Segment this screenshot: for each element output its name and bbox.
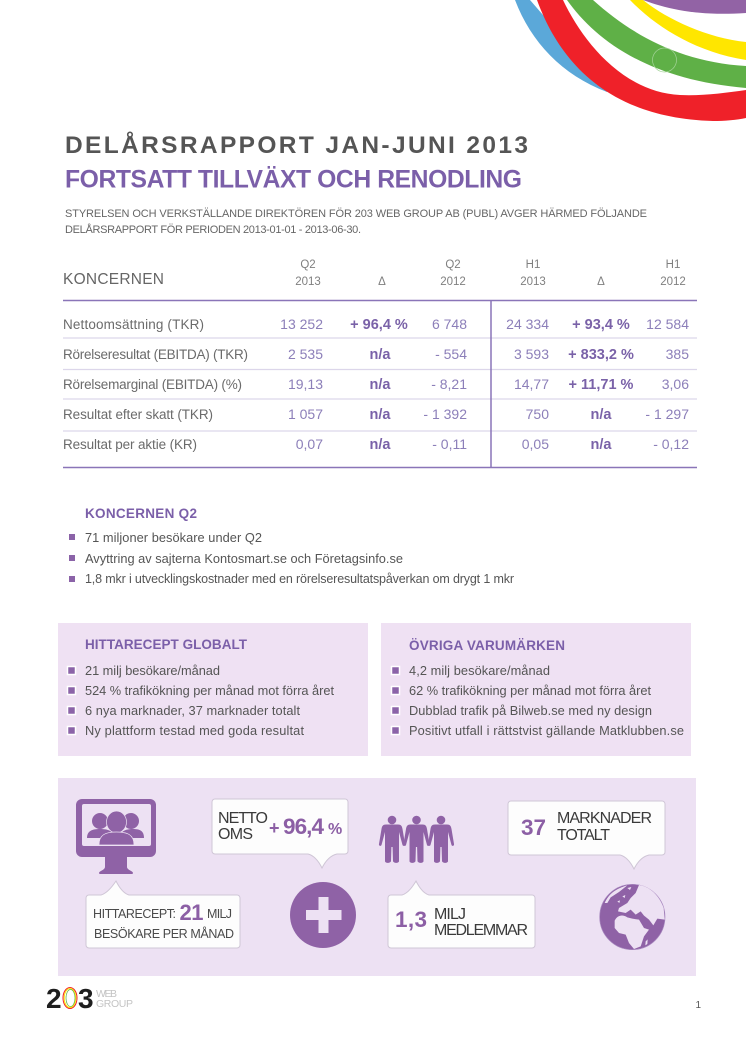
logo: 203 Web Group: WEB — [96, 988, 117, 1000]
callout: 1,3 milj medlemmar: MEDLEMMAR — [434, 922, 528, 939]
column headers: 2012 — [440, 276, 466, 288]
row: Nettoomsättning — [63, 316, 689, 333]
subtitle: FORTSATT TILLVÄXT OCH RENODLING — [65, 166, 522, 194]
row: Resultat efter skatt: - 1 392 — [423, 406, 467, 422]
callout: Hittarecept 21 milj: MILJ — [207, 907, 232, 921]
column headers: Δ — [597, 276, 605, 288]
row: Rörelsemarginal: Rörelsemarginal (EBITDA) (%) — [63, 377, 242, 392]
row: Resultat efter skatt: Resultat efter skatt (TKR) — [63, 407, 213, 422]
icon: monitor with people — [76, 799, 156, 874]
row: Resultat efter skatt: n/a — [591, 407, 612, 423]
icon: globe — [600, 884, 665, 950]
panel list: Dubblad trafik på Bilweb.se med ny design — [409, 703, 652, 718]
column headers: Q2 — [445, 259, 461, 271]
logo: 203 Web Group — [46, 983, 133, 1014]
row: Resultat per aktie: 0,05 — [522, 436, 549, 452]
row: Nettoomsättning: 12 584 — [646, 316, 689, 332]
callout: 37 marknader totalt: TOTALT — [557, 827, 610, 844]
row: Rörelseresultat: + 833,2 % — [568, 347, 634, 363]
row: Rörelseresultat — [63, 346, 689, 363]
row: Resultat efter skatt — [63, 406, 689, 423]
panel heading: HITTARECEPT GLOBALT — [85, 637, 248, 652]
logo: 203 Web Group: GROUP — [96, 998, 133, 1010]
row: Rörelsemarginal: - 8,21 — [431, 376, 467, 392]
row: Nettoomsättning: 24 334 — [506, 316, 549, 332]
callout: 37 marknader totalt: MARKNADER — [557, 810, 652, 827]
callout: 1,3 milj medlemmar: 1,3 — [395, 907, 427, 932]
row: Rörelseresultat: Rörelseresultat (EBITDA) (TKR) — [63, 347, 248, 362]
icon: three people — [379, 816, 454, 863]
callout: Netto oms +96,4 %: NETTO — [218, 810, 268, 827]
column headers — [295, 259, 686, 288]
callout: Hittarecept 21 milj: BESÖKARE PER MÅNAD — [94, 926, 234, 941]
callout: 37 marknader totalt — [508, 801, 665, 869]
panel: Hittarecept globalt — [58, 623, 368, 756]
panel list: 62 % trafikökning per månad mot förra året — [409, 683, 651, 698]
column headers: 2013 — [520, 276, 546, 288]
icon: plus circle — [290, 882, 356, 948]
panel list — [68, 663, 334, 738]
panel list: 524 % trafikökning per månad mot förra året — [85, 683, 334, 698]
row: Rörelseresultat: - 554 — [435, 346, 467, 362]
panel list: Positivt utfall i rättstvist gällande Matklubben.se — [409, 723, 684, 738]
column headers: 2013 — [295, 276, 321, 288]
panel heading: ÖVRIGA VARUMÄRKEN — [409, 638, 565, 653]
callout: 1,3 milj medlemmar — [388, 881, 535, 948]
row: Rörelsemarginal: 3,06 — [662, 376, 689, 392]
row: Nettoomsättning: + 96,4 % — [350, 317, 408, 333]
intro text: STYRELSEN OCH VERKSTÄLLANDE DIREKTÖREN FÖR 203 WEB GROUP AB (PUBL) AVGER HÄRMED FÖLJANDE — [65, 208, 647, 220]
bullet list: Avyttring av sajterna Kontosmart.se och Företagsinfo.se — [85, 551, 403, 566]
panel list: 21 milj besökare/månad — [85, 663, 220, 678]
title: DELÅRSRAPPORT JAN-JUNI 2013 — [65, 131, 528, 159]
callout: 37 marknader totalt: 37 — [521, 815, 546, 840]
callout: Netto oms +96,4 %: OMS — [218, 826, 253, 843]
logo: 203 Web Group: 2 — [46, 983, 62, 1014]
row: Resultat per aktie: n/a — [591, 437, 612, 453]
callout: Hittarecept 21 milj — [86, 881, 240, 948]
row: Resultat per aktie: n/a — [370, 437, 391, 453]
row: Resultat per aktie — [63, 436, 689, 453]
panel: Övriga varumärken — [381, 623, 691, 756]
panel: key figures — [58, 778, 696, 976]
intro text — [65, 208, 647, 236]
callout: Hittarecept 21 milj: 21 — [180, 900, 204, 925]
column headers: 2012 — [660, 276, 686, 288]
section: Koncernen Q2 — [69, 506, 514, 586]
row: Nettoomsättning: 13 252 — [280, 316, 323, 332]
panel list: 4,2 milj besökare/månad — [409, 663, 550, 678]
table heading: KONCERNEN — [63, 271, 164, 288]
logo: 203 Web Group: 3 — [78, 983, 94, 1014]
row: Resultat efter skatt: 750 — [526, 406, 549, 422]
panel list — [392, 663, 684, 738]
column headers: H1 — [526, 259, 540, 271]
column headers: Δ — [378, 276, 386, 288]
row: Resultat per aktie: 0,07 — [296, 436, 323, 452]
row: Rörelseresultat: n/a — [370, 347, 391, 363]
row: Rörelsemarginal: n/a — [370, 377, 391, 393]
callout: 1,3 milj medlemmar: MILJ — [434, 906, 466, 923]
callout: Netto oms +96,4 % — [212, 799, 348, 868]
row: Resultat efter skatt: n/a — [370, 407, 391, 423]
financial table — [63, 259, 697, 468]
row: Resultat per aktie: Resultat per aktie (KR) — [63, 437, 197, 452]
bullet list: 71 miljoner besökare under Q2 — [85, 530, 262, 545]
row: Resultat efter skatt: - 1 297 — [645, 406, 689, 422]
panel list: 6 nya marknader, 37 marknader totalt — [85, 703, 300, 718]
row: Rörelsemarginal — [63, 376, 689, 393]
section heading: KONCERNEN Q2 — [85, 506, 197, 521]
callout: Hittarecept 21 milj: HITTARECEPT: — [93, 907, 176, 921]
column headers: H1 — [666, 259, 680, 271]
row: Nettoomsättning: 6 748 — [432, 316, 467, 332]
row: Nettoomsättning: + 93,4 % — [572, 317, 630, 333]
row: Rörelseresultat: 3 593 — [514, 346, 549, 362]
page number: 1 — [696, 1000, 702, 1011]
intro text: DELÅRSRAPPORT FÖR PERIODEN 2013-01-01 - 2013-06-30. — [65, 223, 361, 236]
panel list: Ny plattform testad med goda resultat — [85, 723, 304, 738]
row: Rörelseresultat: 385 — [666, 346, 689, 362]
row: Rörelseresultat: 2 535 — [288, 346, 323, 362]
row: Nettoomsättning: Nettoomsättning (TKR) — [63, 317, 204, 332]
row: Resultat efter skatt: 1 057 — [288, 406, 323, 422]
row: Resultat per aktie: - 0,12 — [653, 436, 689, 452]
bullet list — [69, 530, 514, 586]
row: Rörelsemarginal: 14,77 — [514, 376, 549, 392]
callout: Netto oms +96,4 %: % — [328, 821, 342, 838]
row: Rörelsemarginal: + 11,71 % — [569, 377, 634, 393]
row: Rörelsemarginal: 19,13 — [288, 376, 323, 392]
callout: Netto oms +96,4 %: + — [269, 818, 280, 838]
bullet list: 1,8 mkr i utvecklingskostnader med en rörelseresultatspåverkan om drygt 1 mkr — [85, 572, 514, 586]
decorative colour arcs — [515, 0, 746, 121]
row: Resultat per aktie: - 0,11 — [432, 436, 467, 452]
column headers: Q2 — [300, 259, 316, 271]
callout: Netto oms +96,4 %: 96,4 — [283, 814, 324, 839]
